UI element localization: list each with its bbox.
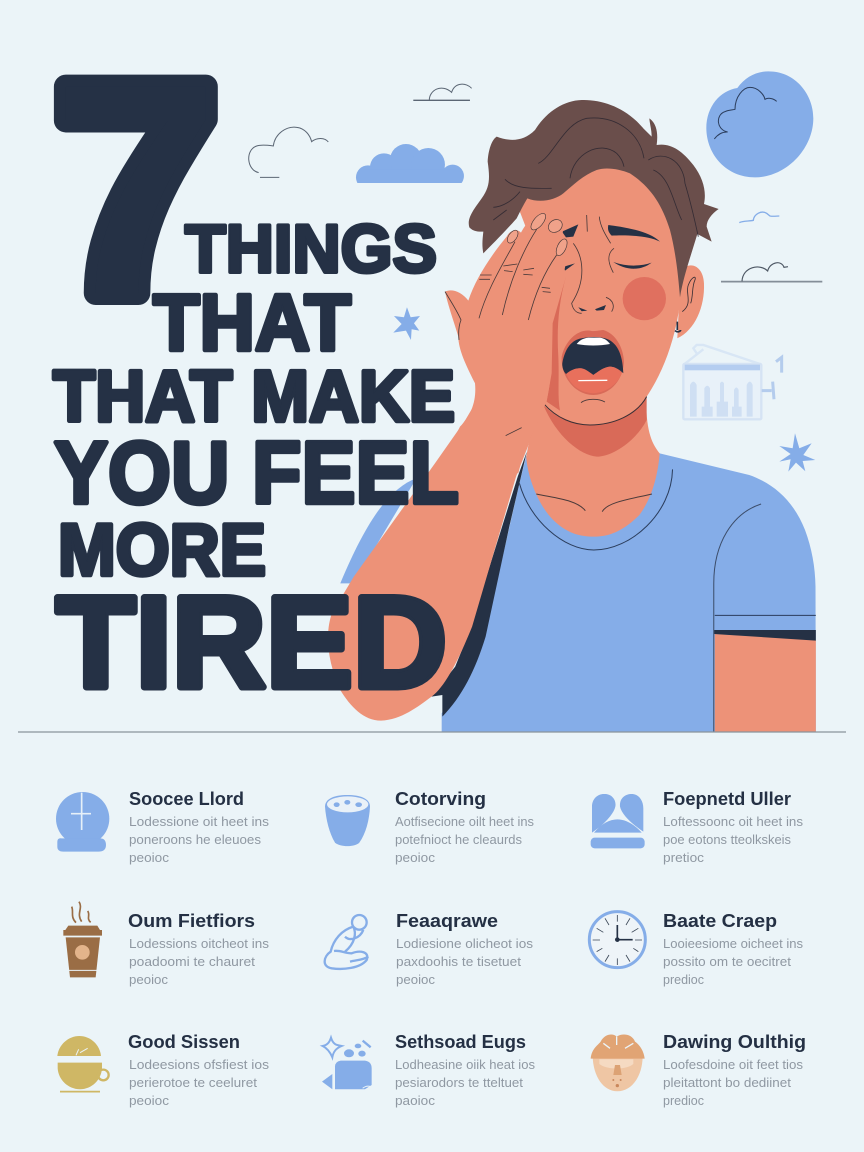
description: Lodiesione olicheot ios	[396, 936, 534, 951]
icon: outlined figure	[325, 915, 368, 969]
hair strand lines	[493, 118, 698, 237]
description: peoioc	[129, 972, 169, 987]
finger lines and nails	[445, 229, 557, 436]
description: Lodessione oit heet ins	[129, 814, 270, 829]
title line: TIRED: TIRED	[56, 569, 447, 715]
description: Lodeesions ofsfiest ios	[129, 1057, 270, 1072]
description	[663, 814, 804, 865]
illustration: yawning person	[328, 100, 816, 732]
description	[129, 814, 270, 865]
face and hair	[437, 100, 719, 473]
title	[53, 21, 459, 715]
description: peoioc	[395, 850, 436, 865]
nose and wrinkles	[572, 215, 614, 313]
hair	[469, 100, 719, 297]
title line: THAT MAKE: THAT MAKE	[53, 357, 455, 437]
description: paoioc	[395, 1093, 436, 1108]
item: Feaaqrawe	[325, 910, 534, 987]
heading: Oum Fietfiors	[128, 910, 255, 931]
description: Lodheasine oiik heat ios	[395, 1057, 535, 1072]
description	[395, 1057, 535, 1108]
neck	[519, 400, 673, 550]
heading: Dawing Oulthig	[663, 1031, 806, 1052]
heading: Baate Craep	[663, 910, 777, 931]
heading: Soocee Llord	[129, 788, 244, 809]
arm	[328, 380, 540, 721]
heading: Sethsoad Eugs	[395, 1031, 526, 1052]
description	[395, 814, 534, 865]
icon: takeaway coffee cup	[63, 902, 102, 977]
neck shadow	[543, 397, 647, 457]
description: pesiarodors te tteltuet	[395, 1075, 523, 1090]
heading: Foepnetd Uller	[663, 788, 791, 809]
heading: Feaaqrawe	[396, 910, 498, 931]
icon: sparkle and blue blocks	[322, 1038, 372, 1089]
description	[129, 936, 270, 987]
icon: star beside title	[393, 307, 420, 340]
description: poe eotons tteolkskeis	[663, 832, 791, 847]
description: predioc	[663, 1093, 704, 1108]
description: Lodessions oitcheot ins	[129, 936, 270, 951]
item: Cotorving	[325, 788, 534, 865]
icon: star near the calendar	[779, 433, 815, 472]
description	[663, 936, 803, 987]
description: possito om te oecitret	[663, 954, 791, 969]
ear detail and earring	[682, 277, 695, 312]
description	[396, 936, 534, 987]
icon: wall clock	[589, 912, 645, 968]
item: Dawing Oulthig	[591, 1031, 806, 1108]
description: peoioc	[396, 972, 436, 987]
icon: outlined cloud on line, top centre	[413, 84, 472, 100]
icon: outlined cloud, left	[249, 127, 328, 177]
eyebrow and eyes	[608, 225, 660, 242]
description: Loftessoonc oit heet ins	[663, 814, 804, 829]
description: poadoomi te chauret	[129, 954, 255, 969]
face shadow	[547, 277, 566, 411]
icon: face with brain cap	[591, 1035, 645, 1091]
ear	[677, 265, 704, 338]
description: peoioc	[129, 1093, 170, 1108]
icon: blue moon with cloud outline	[706, 71, 813, 177]
head	[517, 165, 681, 425]
heading: Cotorving	[395, 788, 486, 809]
description: pretioc	[663, 850, 705, 865]
description: potefnioct he cleaurds	[395, 832, 522, 847]
cheek	[623, 277, 666, 320]
title line: THAT: THAT	[153, 278, 351, 367]
big number 7: 7	[53, 21, 219, 357]
icon: small blue cloud line	[739, 212, 779, 223]
icon: yellow teacup	[57, 1036, 109, 1092]
description: Aotfisecione oilt heet ins	[395, 814, 534, 829]
heading: Good Sissen	[128, 1031, 240, 1052]
hand	[437, 213, 568, 473]
mouth	[562, 330, 624, 395]
title line: THINGS: THINGS	[185, 211, 437, 287]
item: Good Sissen	[57, 1031, 270, 1108]
icon: blue globe	[56, 792, 109, 852]
description: poneroons he eleuoes	[129, 832, 262, 847]
item: Baate Craep	[589, 910, 803, 987]
icon: faded calendar chart	[683, 345, 782, 419]
description: Looieesiome oicheet ins	[663, 936, 803, 951]
description: Loofesdoine oit feet tios	[663, 1057, 804, 1072]
item: Sethsoad Eugs	[322, 1031, 535, 1108]
icon: outlined cloud on line, right	[721, 263, 822, 282]
item: Oum Fietfiors	[63, 902, 270, 987]
description	[663, 1057, 804, 1108]
icon: blue pillow shape	[591, 794, 645, 848]
description: perierotoe te ceeluret	[129, 1075, 257, 1090]
item: Soocee Llord	[56, 788, 270, 865]
description: predioc	[663, 972, 704, 987]
title line: YOU FEEL: YOU FEEL	[54, 423, 459, 522]
description: pleitattont bo dediinet	[663, 1075, 791, 1090]
icon: solid blue cloud	[356, 144, 464, 183]
icon: blue cup with dots	[325, 795, 370, 846]
divider line under the hero	[18, 731, 846, 733]
description: peoioc	[129, 850, 170, 865]
description: paxdoohis te tisetuet	[396, 954, 521, 969]
description	[129, 1057, 270, 1108]
title line: MORE: MORE	[58, 510, 266, 591]
item: Foepnetd Uller	[591, 788, 804, 865]
shirt	[340, 453, 816, 732]
